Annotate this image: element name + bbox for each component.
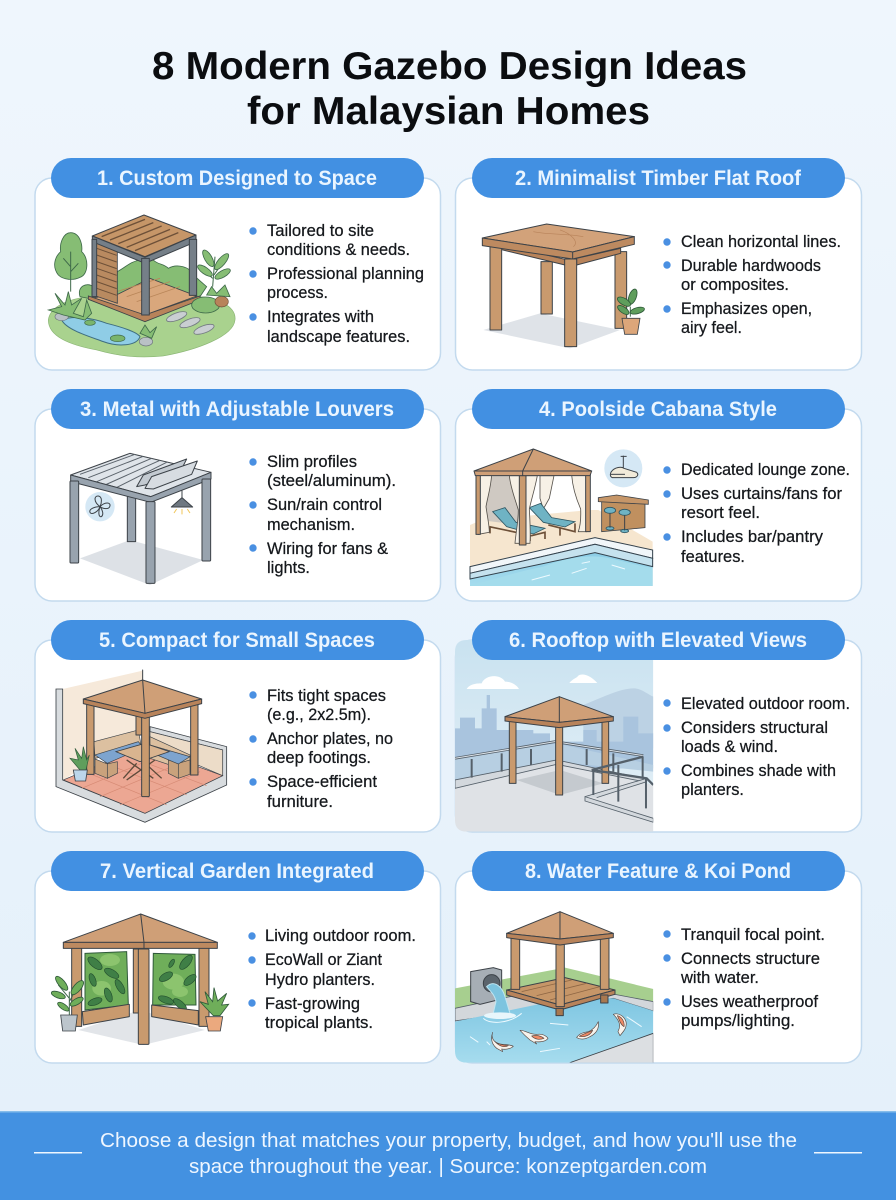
bullet list: card 1: Professional planning [267, 265, 424, 283]
illustration: gazebo over koi pond with water feature [455, 912, 653, 1063]
bullet list: card 7: EcoWall or Ziant [265, 951, 382, 969]
bullet list: card 1: conditions & needs. [267, 241, 410, 259]
bullet list: card 6: loads & wind. [681, 738, 778, 756]
bullet list: card 5: furniture. [267, 793, 333, 811]
bullet list: card 2: airy feel. [681, 319, 742, 337]
bullet list: card 2: Clean horizontal lines. [681, 233, 841, 251]
bullet list: card 6: Considers structural [681, 719, 828, 737]
heading: card 1: 1. Custom Designed to Space [97, 166, 377, 190]
bullet list: card 6: Elevated outdoor room. [681, 695, 850, 713]
panel: 3. Metal with Adjustable Louvers [35, 389, 440, 601]
bullet list: card 2 [663, 233, 841, 337]
heading: card 6: 6. Rooftop with Elevated Views [509, 628, 807, 652]
heading: card 5: 5. Compact for Small Spaces [99, 628, 375, 652]
bullet list: card 7: Hydro planters. [265, 971, 375, 989]
panel: 8. Water Feature & Koi Pond [455, 851, 862, 1063]
bullet list: card 3: Slim profiles [267, 453, 357, 471]
heading: card 5 [51, 620, 424, 660]
illustration: gazebo with vertical garden walls [50, 914, 229, 1045]
card background [456, 178, 862, 370]
heading: card 6 [472, 620, 845, 660]
card background [35, 871, 440, 1063]
card background [456, 409, 862, 601]
panel: 1. Custom Designed to Space [35, 158, 440, 370]
panel: 2. Minimalist Timber Flat Roof [456, 158, 862, 370]
heading: card 7: 7. Vertical Garden Integrated [100, 859, 374, 883]
illustration: metal pergola with adjustable louvers [70, 453, 211, 585]
bullet list: card 8: Tranquil focal point. [681, 926, 825, 944]
bullet list: card 5: Fits tight spaces [267, 687, 386, 705]
bullet list: card 6: Combines shade with [681, 762, 836, 780]
bullet list: card 7 [248, 927, 416, 1032]
bullet list: card 4: resort feel. [681, 504, 760, 522]
bullet list: card 5: Anchor plates, no [267, 730, 393, 748]
heading: card 4: 4. Poolside Cabana Style [539, 397, 777, 421]
heading: card 8 [472, 851, 845, 891]
panel: 6. Rooftop with Elevated Views [455, 620, 862, 833]
bullet list: card 3: lights. [267, 559, 310, 577]
panel: 7. Vertical Garden Integrated [35, 851, 440, 1063]
heading: card 2: 2. Minimalist Timber Flat Roof [515, 166, 802, 190]
bullet list: card 8: pumps/lighting. [681, 1012, 795, 1030]
bullet list: card 5 [249, 687, 393, 811]
card background [35, 640, 440, 832]
bullet list: card 5: (e.g., 2x2.5m). [267, 706, 371, 724]
bullet list: card 5: deep footings. [267, 749, 371, 767]
bullet list: card 4 [663, 461, 850, 566]
illustration: poolside cabana with loungers and bar [470, 449, 653, 586]
heading: card 8: 8. Water Feature & Koi Pond [525, 859, 791, 883]
bullet list: card 8 [663, 926, 825, 1030]
koi fish [492, 1014, 626, 1052]
footer banner [0, 1111, 896, 1200]
bullet list: card 4: Dedicated lounge zone. [681, 461, 850, 479]
bullet list: card 2: Emphasizes open, [681, 300, 812, 318]
bullet list: card 7: tropical plants. [265, 1014, 373, 1032]
bullet list: card 1: Tailored to site [267, 222, 374, 240]
bullet list: card 3 [249, 453, 396, 577]
heading: card 7 [51, 851, 424, 891]
bullet list: card 2: or composites. [681, 276, 789, 294]
heading: card 4 [472, 389, 845, 429]
heading: card 3 [51, 389, 424, 429]
bullet list: card 5: Space-efficient [267, 773, 377, 791]
bullet list: card 4: Uses curtains/fans for [681, 485, 843, 503]
bullet list: card 3: mechanism. [267, 516, 355, 534]
bullet list: card 1: Integrates with [267, 308, 374, 326]
card background [35, 178, 440, 370]
card background [456, 871, 862, 1063]
heading: card 3: 3. Metal with Adjustable Louvers [80, 397, 394, 421]
illustration: rooftop gazebo with city skyline [455, 640, 653, 833]
bullet list: card 8: Connects structure [681, 950, 820, 968]
illustration: custom pergola with garden and pond [48, 215, 235, 357]
panel: 4. Poolside Cabana Style [456, 389, 862, 601]
bullet list: card 3: (steel/aluminum). [267, 472, 396, 490]
bullet list: card 6 [663, 695, 850, 799]
footer banner: space throughout the year. | Source: konzeptgarden.com [189, 1155, 707, 1178]
bullet list: card 1: process. [267, 284, 328, 302]
bullet list: card 1 [249, 222, 424, 346]
panel: 5. Compact for Small Spaces [35, 620, 440, 832]
card background [35, 409, 440, 601]
illustration: compact gazebo on a small patio [56, 670, 227, 822]
bullet list: card 1: landscape features. [267, 328, 410, 346]
bullet list: card 3: Sun/rain control [267, 496, 382, 514]
illustration: timber flat-roof gazebo [482, 224, 645, 348]
bullet list: card 3: Wiring for fans & [267, 540, 388, 558]
title: for Malaysian Homes [247, 90, 650, 133]
title: 8 Modern Gazebo Design Ideas [152, 45, 747, 88]
bullet list: card 7: Fast-growing [265, 995, 360, 1013]
bullet list: card 4: features. [681, 548, 745, 566]
heading: card 1 [51, 158, 424, 198]
bullet list: card 2: Durable hardwoods [681, 257, 821, 275]
bullet list: card 6: planters. [681, 781, 744, 799]
bullet list: card 8: Uses weatherproof [681, 993, 818, 1011]
bullet list: card 7: Living outdoor room. [265, 927, 416, 945]
title [152, 45, 747, 133]
heading: card 2 [472, 158, 845, 198]
card background [456, 640, 862, 832]
bullet list: card 4: Includes bar/pantry [681, 528, 824, 546]
bullet list: card 8: with water. [680, 969, 759, 987]
footer banner: Choose a design that matches your property, budget, and how you'll use the [100, 1129, 797, 1152]
